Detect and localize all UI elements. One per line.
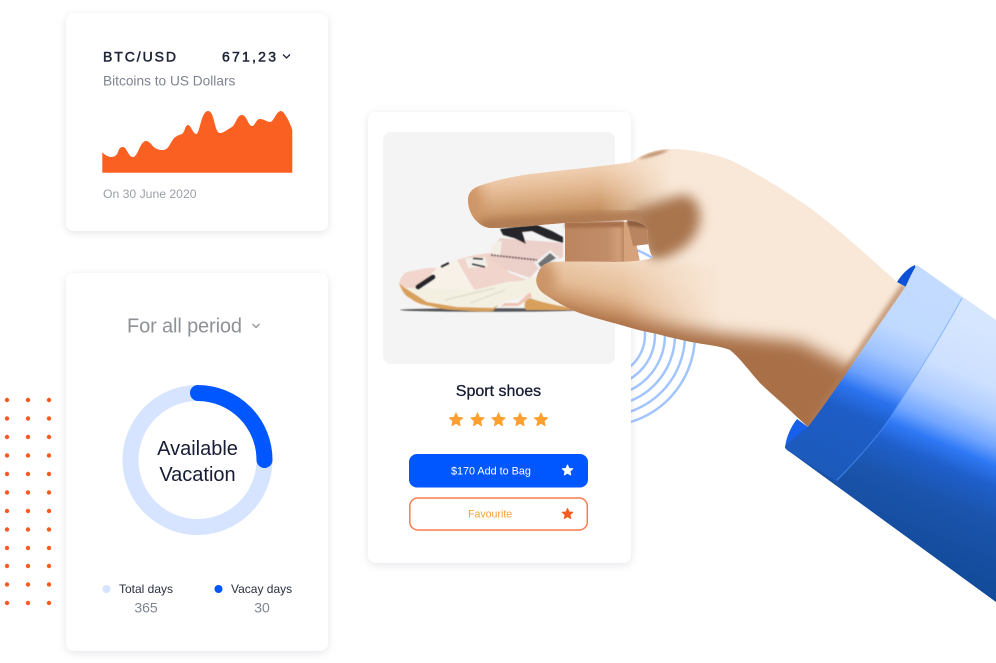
button: favourite: Favourite (468, 508, 512, 520)
date label: On 30 June 2020 (103, 187, 197, 201)
middle fingers behind (565, 220, 650, 262)
cuff (785, 265, 962, 482)
legend: total days: Total days (119, 582, 173, 596)
area chart (102, 111, 292, 173)
legend: vacay days: 30 (254, 600, 270, 616)
cuff fold line (837, 298, 962, 480)
heading: BTC/USD: BTC/USD (103, 48, 176, 64)
hand and sleeve illustration (440, 140, 996, 602)
legend: vacay days: Vacay days (231, 582, 292, 596)
icon: value chevron (283, 54, 290, 58)
period selector: For all period (127, 316, 242, 338)
sleeve (785, 265, 996, 602)
shoe illustration (399, 225, 580, 312)
concentric rings (513, 244, 695, 426)
panel: BTC/USD price card (66, 13, 328, 231)
product name: Sport shoes (456, 383, 541, 400)
sleeve lining (785, 265, 917, 448)
donut label: Available (157, 438, 238, 460)
product image background (383, 132, 615, 364)
hand (468, 149, 906, 427)
legend: total days (102, 582, 173, 616)
star rating (449, 413, 548, 426)
button: favourite (410, 498, 587, 530)
legend: vacay days (214, 582, 292, 616)
button: add to bag (409, 454, 588, 488)
panel: product card (368, 112, 631, 563)
dot pattern (5, 398, 51, 605)
donut chart (130, 393, 264, 527)
legend: total days: 365 (134, 600, 158, 616)
subtitle: Bitcoins to US Dollars (103, 74, 236, 88)
value: 671,23: 671,23 (222, 48, 276, 64)
donut label: Vacation (159, 464, 236, 486)
panel: available vacation card (66, 273, 328, 651)
icon: period chevron (252, 324, 260, 328)
button: add to bag: $170 Add to Bag (451, 466, 531, 478)
donut label (157, 438, 238, 486)
